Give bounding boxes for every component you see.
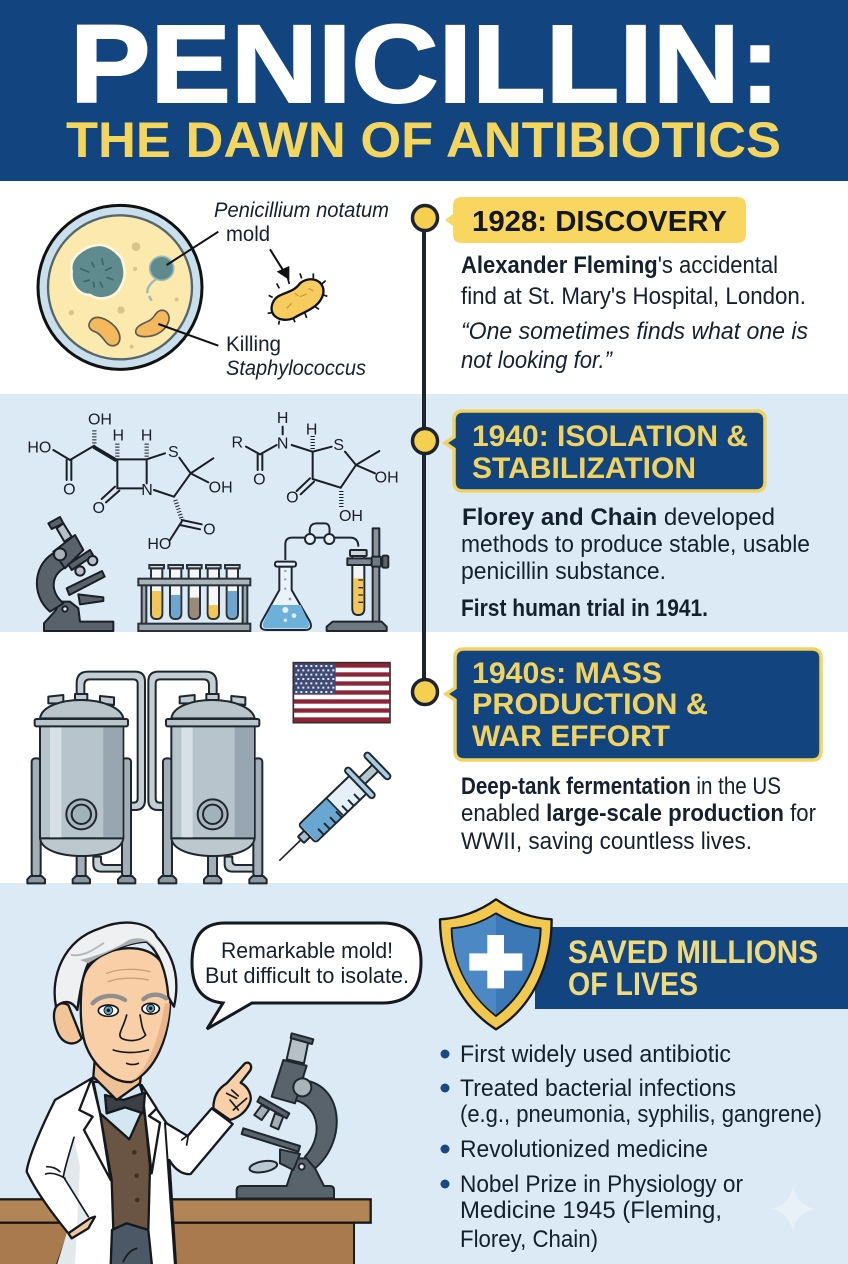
speech bubble: But difficult to isolate. bbox=[205, 963, 409, 988]
heading bbox=[445, 197, 746, 243]
label: Killing Staphylococcus: Killing bbox=[226, 333, 281, 356]
forehead wrinkles bbox=[107, 969, 150, 982]
neck and face bbox=[93, 1057, 143, 1100]
hand in pocket bbox=[68, 1217, 95, 1238]
text: Florey and Chain: Florey and Chain developed bbox=[462, 504, 775, 531]
icon: bacterium bbox=[268, 273, 327, 325]
shirt bbox=[93, 1082, 147, 1140]
panel: saved millions bbox=[440, 899, 848, 1253]
vest bbox=[100, 1107, 150, 1230]
panel: 1928 discovery bbox=[445, 197, 808, 374]
chemical structure: fragment: R bbox=[232, 435, 243, 452]
table bbox=[0, 1199, 371, 1264]
bullet list: Medicine 1945 (Fleming, bbox=[460, 1197, 722, 1224]
speech bubble bbox=[192, 923, 421, 1029]
bullet list: Nobel Prize in Physiology or bbox=[460, 1171, 743, 1198]
chemical structure: fragment: OH bbox=[375, 469, 399, 486]
panel: 1940s mass production: WWII, saving countless lives. bbox=[461, 828, 752, 855]
hair bbox=[55, 923, 176, 1010]
panel: isolation illustration bbox=[27, 410, 399, 631]
label: Penicillium notatum mold: Penicillium notatum bbox=[214, 199, 389, 222]
chemical structure: fragment: H bbox=[277, 410, 288, 427]
chemical structure: fragment bbox=[232, 410, 399, 525]
icon: fermentation tanks bbox=[27, 672, 267, 883]
marker 1940s bbox=[412, 680, 438, 704]
marker 1928 bbox=[412, 206, 438, 230]
icon: shield bbox=[440, 899, 552, 1029]
chemical structure: fragment: O bbox=[286, 489, 299, 506]
chemical structure: penicillin: OH bbox=[88, 411, 112, 428]
bullet list: First widely used antibiotic bbox=[460, 1041, 731, 1068]
marker 1940 bbox=[412, 428, 438, 454]
chemical structure: penicillin: N bbox=[141, 482, 153, 499]
panel: discovery illustration bbox=[38, 199, 389, 380]
text: first human trial: First human trial in 1941. bbox=[461, 595, 708, 622]
heading bbox=[446, 649, 821, 760]
panel: 1940s mass production bbox=[446, 649, 821, 855]
heading: PRODUCTION & bbox=[472, 688, 708, 721]
panel: saved millions: OF LIVES bbox=[568, 966, 698, 1002]
chemical structure: fragment: S bbox=[333, 437, 344, 454]
timeline bbox=[412, 206, 438, 704]
icon: syringe bbox=[265, 749, 393, 875]
panel: production illustration bbox=[27, 663, 393, 883]
chemical structure: fragment: O bbox=[253, 471, 266, 488]
bow tie bbox=[105, 1093, 145, 1113]
panel: discovery illustration: Staphylococcus bbox=[226, 357, 366, 380]
lapels bbox=[79, 1078, 111, 1180]
heading: SAVED MILLIONS bbox=[568, 934, 818, 970]
heading: 1928: DISCOVERY bbox=[472, 206, 727, 238]
icon: sparkle bbox=[771, 1186, 815, 1231]
chemical structure: fragment: OH bbox=[339, 508, 363, 525]
bullet list: Revolutionized medicine bbox=[460, 1136, 708, 1163]
chemical structure: penicillin: OH bbox=[209, 479, 233, 496]
icon: flask and tube bbox=[261, 523, 358, 630]
chemical structure: penicillin: O bbox=[92, 500, 105, 517]
subtitle: THE DAWN OF ANTIBIOTICS bbox=[66, 112, 781, 168]
panel: 1928 discovery: not looking for.” bbox=[461, 347, 613, 374]
trousers bbox=[111, 1223, 152, 1264]
heading: WAR EFFORT bbox=[472, 720, 670, 753]
bullet list: (e.g., pneumonia, syphilis, gangrene) bbox=[460, 1101, 822, 1128]
heading: 1940: ISOLATION & bbox=[472, 420, 748, 453]
chemical structure: fragment: H bbox=[306, 421, 317, 438]
arm shading bbox=[57, 1137, 88, 1264]
arrow to bacterium bbox=[270, 249, 289, 280]
chemical structure: penicillin: S bbox=[168, 444, 179, 461]
text: deep-tank fermentation: Deep-tank fermentation in the US bbox=[461, 773, 781, 800]
heading: 1940s: MASS bbox=[472, 657, 662, 690]
icon: petri dish bbox=[38, 205, 218, 369]
panel: 1940 isolation: penicillin substance. bbox=[461, 558, 666, 585]
bullet list: Treated bacterial infections bbox=[460, 1075, 736, 1102]
icon: test tube rack bbox=[138, 565, 250, 631]
chemical structure: penicillin: H bbox=[113, 427, 124, 444]
character: Fleming bbox=[27, 923, 251, 1264]
text: Fleming: Alexander Fleming's accidental bbox=[461, 252, 778, 279]
icon: microscope bbox=[37, 517, 113, 631]
panel: 1940 isolation: methods to produce stable, usable bbox=[461, 531, 810, 558]
panel: discovery illustration: mold bbox=[226, 223, 270, 246]
ear bbox=[54, 1003, 82, 1043]
panel: 1928 discovery: find at St. Mary's Hospital, London. bbox=[461, 283, 806, 310]
chemical structure: penicillin: HO bbox=[147, 536, 171, 553]
panel: Fleming illustration bbox=[0, 923, 421, 1264]
chemical structure: penicillin: O bbox=[203, 521, 216, 538]
pointing hand bbox=[213, 1063, 251, 1120]
icon: US flag bbox=[293, 663, 390, 723]
chemical structure: penicillin: O bbox=[63, 481, 76, 498]
chemical structure: penicillin: H bbox=[141, 427, 152, 444]
brows and eyes bbox=[93, 995, 166, 1003]
nose and mouth bbox=[120, 1015, 146, 1041]
title banner bbox=[0, 0, 848, 181]
panel: 1940s mass production: enabled large-scale production for bbox=[461, 800, 816, 827]
icon: microscope on table bbox=[237, 1033, 337, 1198]
icon: stand with tube bbox=[327, 528, 388, 631]
banner bbox=[535, 927, 848, 1009]
bullet list bbox=[440, 1041, 822, 1253]
chemical structure: penicillin bbox=[27, 411, 233, 553]
speech bubble: Remarkable mold! bbox=[221, 938, 393, 963]
chemical structure: penicillin: HO bbox=[27, 439, 51, 456]
text: quote: “One sometimes finds what one is bbox=[461, 318, 808, 345]
heading bbox=[445, 411, 765, 491]
chemical structure: fragment: N bbox=[277, 435, 288, 452]
bullet list: Florey, Chain) bbox=[460, 1226, 598, 1253]
heading: STABILIZATION bbox=[472, 452, 696, 485]
panel: 1940 isolation bbox=[445, 411, 810, 622]
title: PENICILLIN: bbox=[70, 3, 780, 126]
lab coat bbox=[27, 1078, 233, 1264]
